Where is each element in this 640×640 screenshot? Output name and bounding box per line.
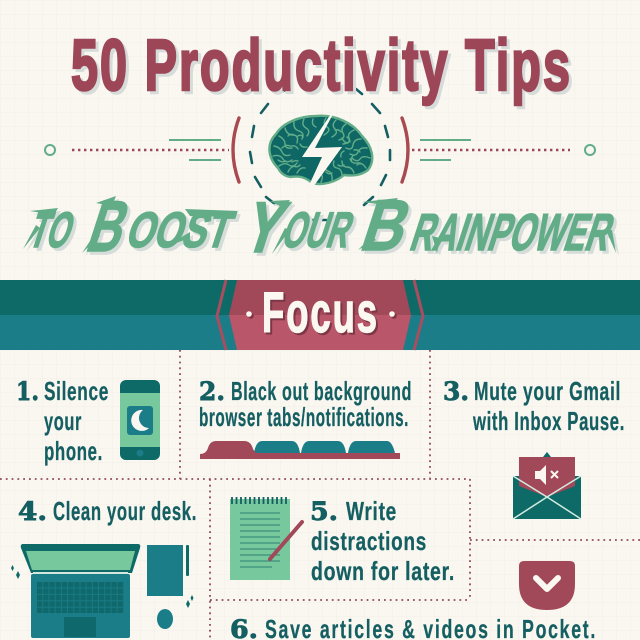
header emblem [45,89,595,220]
left green lines [169,140,221,160]
tip 5: 5. [310,497,338,526]
tip 4: 4. [18,497,47,526]
tip 5 [310,496,455,586]
tip 1: Silence [44,376,109,406]
hexagon lower half [229,315,411,350]
icon: brain [269,116,372,184]
left dotted rule [72,149,229,151]
subtitle: Y [235,187,297,268]
icon: pocket shield [519,561,575,610]
icon: notebook [147,545,183,596]
icon: pencil [270,522,302,559]
subtitle: B [79,186,139,267]
subtitle: TO [24,202,82,258]
dashed circle [250,89,390,220]
tip 5: distractions [311,526,427,556]
tip 5: Write [346,496,397,526]
left red bracket [233,118,239,182]
tip 1: your [44,406,82,436]
icon: stylus [186,545,189,576]
icon: lightning bolt [300,99,342,205]
subtitle: OOST [121,202,241,258]
icon: browser tabs [200,441,400,459]
icon: laptop [21,544,140,638]
tip 2: browser tabs/notifications. [199,402,409,432]
tip 4: Clean your desk. [53,496,197,526]
tip 2: Black out background [231,376,412,406]
tip 1 [16,376,109,466]
right red bracket [402,118,408,182]
tip 3 [443,376,625,436]
subtitle: B [353,185,421,266]
right ring [585,145,595,155]
section band: Focus [0,280,640,350]
tip 2 [199,376,412,432]
subtitle [23,185,621,268]
heading: Focus [246,281,395,345]
right dotted rule [412,149,570,151]
tip 5: down for later. [311,556,455,586]
hexagon outlines [217,280,423,350]
hexagon badge [229,280,411,350]
sparkles [11,565,194,608]
subtitle: OUR [277,202,361,258]
right green lines [420,140,471,160]
tip 1: 1. [16,377,39,406]
icon: phone [120,380,160,460]
heading: Focus: Focus [262,281,379,345]
icon: muted envelope [513,452,581,519]
left ring [45,145,55,155]
icon: mouse [157,609,173,629]
tip 1: phone. [44,436,103,466]
tip 3: 3. [443,377,469,406]
dotted dividers [0,350,640,640]
icon: notepad [230,497,302,580]
tip 4 [18,496,197,526]
tip 2: 2. [199,377,225,406]
